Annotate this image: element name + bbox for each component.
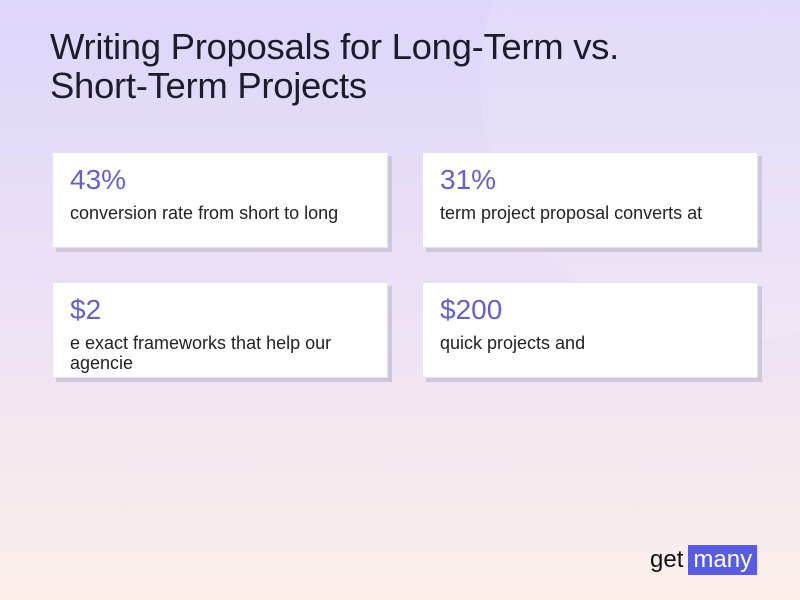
card: $200: $200 [440, 294, 502, 325]
logo: get [650, 546, 683, 573]
card: $2: e exact frameworks that help our agencie [70, 333, 331, 373]
card: 31%: term project proposal converts at [440, 203, 702, 223]
card: 43% [52, 152, 388, 248]
card: 43%: conversion rate from short to long [70, 203, 338, 223]
card: 31%: 31% [440, 164, 496, 195]
logo: many [693, 546, 752, 573]
logo [650, 545, 757, 575]
card: $200: quick projects and [440, 333, 585, 353]
card: 31% [422, 152, 758, 248]
title [50, 26, 619, 106]
card: 43%: 43% [70, 164, 126, 195]
title: Short-Term Projects [50, 65, 367, 106]
card: $200 [422, 282, 758, 378]
card: $2 [52, 282, 388, 378]
card: $2: $2 [70, 294, 101, 325]
title: Writing Proposals for Long-Term vs. [50, 26, 619, 67]
